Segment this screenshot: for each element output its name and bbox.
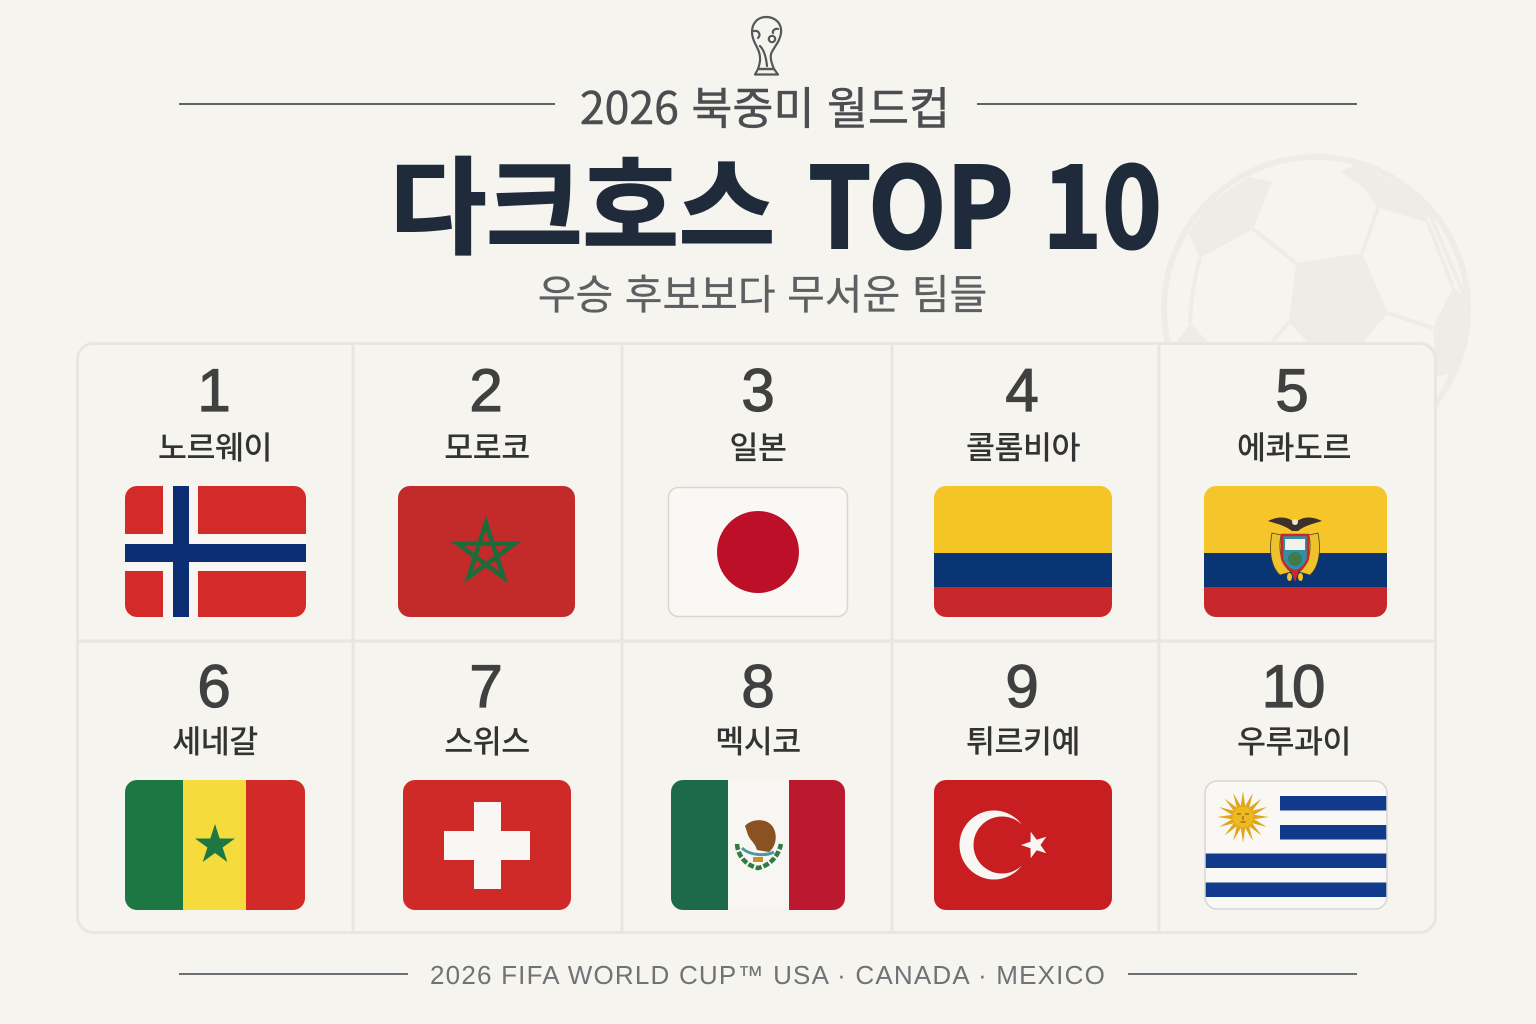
flag: Switzerland [403,780,571,910]
team 10: Uruguay: 10 [1262,653,1324,720]
flag: Morocco [398,486,575,617]
team 9: Turkiye [934,653,1112,910]
team 5: Ecuador: 에콰도르 [1237,422,1351,468]
panel: team grid [78,344,1436,932]
flag: Ecuador [1204,486,1387,617]
team 9: Turkiye: 9 [1005,653,1039,720]
flag: Norway [125,486,306,617]
footer text: 2026 FIFA WORLD CUP™ USA · CANADA · MEXICO [430,960,1106,990]
team 6: Senegal [125,653,305,910]
icon: world cup trophy [752,17,781,74]
flag: Colombia [934,486,1112,617]
heading: event name: 2026 북중미 월드컵 [580,72,950,137]
top rule right [977,103,1357,105]
team 2: Morocco: 2 [469,357,503,424]
top rule left [179,103,555,105]
flag: Mexico [671,780,845,910]
team 10: Uruguay [1205,653,1387,909]
team 5: Ecuador [1204,357,1387,617]
team 6: Senegal: 세네갈 [172,716,258,762]
footer rule left [179,973,408,975]
title: TOP 10 [808,119,1162,281]
team 8: Mexico: 멕시코 [715,716,801,762]
team 2: Morocco: 모로코 [444,422,530,468]
flag: Japan [668,488,848,616]
team 1: Norway [125,357,306,617]
flag: Uruguay [1205,781,1387,909]
team 5: Ecuador: 5 [1275,357,1309,424]
title: 다크호스 [390,124,775,276]
background soccer ball watermark [1164,157,1471,461]
team 7: Switzerland: 7 [469,653,503,720]
team 4: Colombia [934,357,1112,617]
subtitle: 우승 후보보다 무서운 팀들 [538,261,987,321]
team 3: Japan: 3 [741,357,775,424]
team 8: Mexico: 8 [741,653,775,720]
flag: Senegal [125,780,305,910]
team 3: Japan [668,357,848,616]
team 8: Mexico [671,653,845,910]
team 2: Morocco [398,357,575,617]
team 4: Colombia: 4 [1005,357,1039,424]
team 7: Switzerland: 스위스 [444,716,530,762]
team 1: Norway: 노르웨이 [158,422,272,468]
team 7: Switzerland [403,653,571,910]
flag: Turkiye [934,780,1112,910]
footer rule right [1128,973,1357,975]
team 10: Uruguay: 우루과이 [1237,716,1351,762]
team 9: Turkiye: 튀르키예 [966,716,1080,762]
title [390,119,1162,281]
team 4: Colombia: 콜롬비아 [966,422,1080,468]
team 6: Senegal: 6 [197,653,231,720]
team 3: Japan: 일본 [730,422,786,468]
team 1: Norway: 1 [197,357,231,424]
